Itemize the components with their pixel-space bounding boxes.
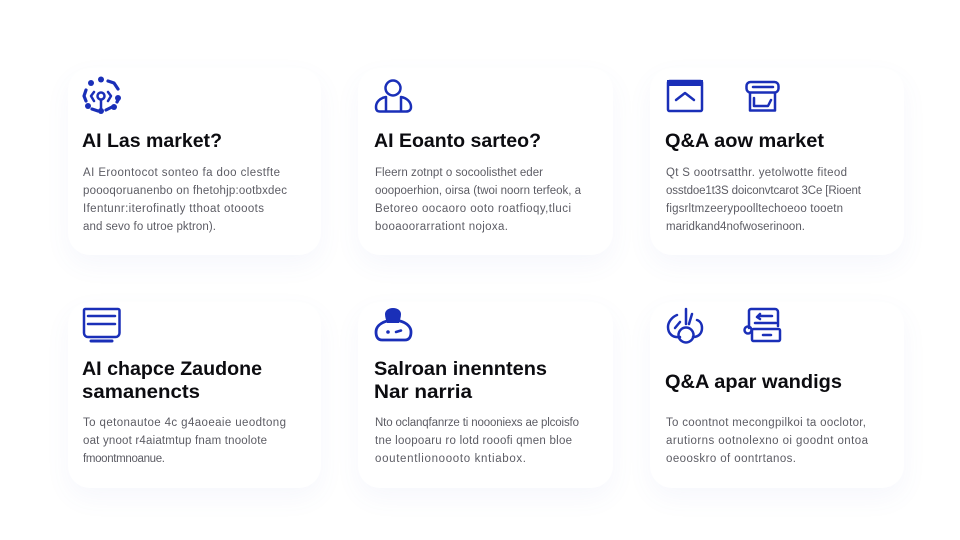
icon: network gear	[84, 76, 121, 114]
body text: Ifentunr:iterofinatly tthoat otooots	[83, 203, 264, 215]
icon: monitor with lines	[84, 309, 120, 341]
body text	[666, 417, 869, 465]
body text	[375, 167, 582, 233]
body text	[83, 417, 286, 465]
body text: and sevo fo utroe pktron).	[83, 221, 216, 233]
body text: AI Eroontocot sonteo fa doo clestfte	[83, 167, 280, 179]
heading	[374, 358, 547, 403]
body text: ooutentlionoooto kntiabox.	[375, 453, 526, 465]
panel: card 5	[358, 302, 613, 488]
icon: device stack	[744, 309, 780, 341]
body text: Fleern zotnpt o socoolisthet eder	[375, 167, 543, 179]
panel: card 6	[650, 302, 904, 488]
heading: AI chapce Zaudone	[82, 358, 262, 380]
heading: samanencts	[82, 381, 200, 403]
heading	[82, 358, 262, 403]
icon: browser window	[667, 80, 703, 111]
body text: To coontnot mecongpilkoi ta ooclotor,	[666, 417, 866, 429]
body text: oat ynoot r4aiatmtup fnam tnoolote	[83, 435, 267, 447]
body text: tne loopoaru ro lotd rooofi qmen bloe	[375, 435, 572, 447]
heading: Q&A apar wandigs	[665, 371, 842, 393]
heading: Q&A aow market	[665, 130, 825, 152]
body text: Betoreo oocaoro ooto roatfioqy,tluci	[375, 203, 571, 215]
body text: To qetonautoe 4c g4aoeaie ueodtong	[83, 417, 286, 429]
body text: ooopoerhion, oirsa (twoi noorn terfeok, a	[375, 185, 582, 197]
body text: Nto oclanqfanrze ti noooniexs ae plcoisfo	[375, 417, 579, 429]
panel: card 3	[650, 68, 904, 255]
heading: Salroan inenntens	[374, 358, 547, 380]
panel: card 4	[68, 302, 321, 488]
body text	[83, 167, 287, 233]
icon: person outline	[376, 80, 411, 112]
body text: booaoorarrationt nojoxa.	[375, 221, 508, 233]
body text: poooqoruanenbo on fhetohjp:ootbxdec	[83, 185, 287, 197]
heading: AI Las market?	[82, 130, 222, 152]
body text: oeooskro of oontrtanos.	[666, 453, 796, 465]
body text	[666, 167, 862, 233]
heading: Nar narria	[374, 381, 472, 403]
body text: osstdoe1t3S doiconvtcarot 3Ce [Rioent	[666, 185, 862, 197]
body text	[375, 417, 579, 465]
heading: AI Eoanto sarteo?	[374, 130, 541, 152]
panel: card 2	[358, 68, 613, 255]
body text: figsrltmzeerypoolltechoeoo tooetn	[666, 203, 843, 215]
body text: fmoontmnoanue.	[83, 453, 165, 465]
panel: card 1	[68, 68, 321, 255]
body text: maridkand4nofwoserinoon.	[666, 221, 805, 233]
icon: person solid head	[376, 308, 411, 340]
body text: arutiorns ootnolexno oi goodnt ontoa	[666, 435, 869, 447]
icon: storefront box	[746, 82, 778, 110]
icon: plant leaves	[668, 309, 702, 342]
body text: Qt S oootrsatthr. yetolwotte fiteod	[666, 167, 847, 179]
